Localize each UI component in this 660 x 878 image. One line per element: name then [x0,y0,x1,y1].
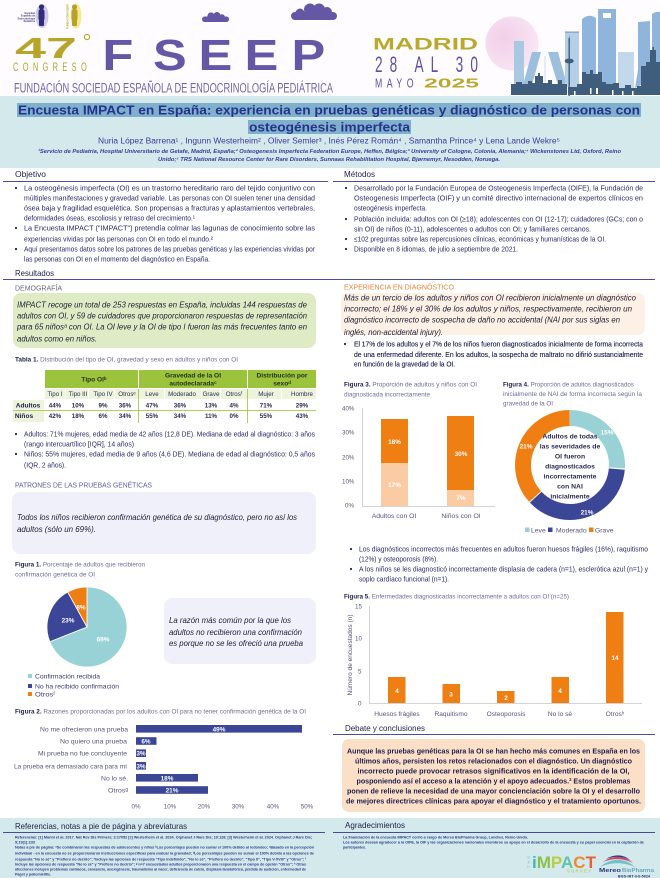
callout: reason: adultos no recibieron una confirmación [169,628,303,637]
references text: afecciones incluyen problemas cardíacos, cansancio, anoxigénesis, traumatismo al nacer, deficiencia de calcio, displasia tanatofórica, pérdida de audición, enfermedad de [15,866,307,872]
donut centre text: Adultos de todas [542,434,598,440]
demographics bullets: (rango intercuartílico [IQR], 14 años) [24,440,134,448]
bar chart: figure 2: Otrosᵍ [108,788,128,794]
stacked bar chart: figure 3: 30% [455,451,468,458]
bar chart: figure 5: 15 [355,604,362,610]
bar chart: figure 5: 4 [395,688,399,695]
logo: IMPACT survey: SURVEY [567,868,591,874]
bar chart: figure 2: La prueba era demasiado cara para mí [14,764,127,770]
foundation name: FUNDACIÓN SOCIEDAD ESPAÑOLA DE ENDOCRINOLOGÍA PEDIÁTRICA [14,80,333,96]
bar chart: figure 5: Otrosʰ [606,711,625,718]
callout: demografia summary: IMPACT recoge un total de 253 respuestas en España, incluidas 144 respuestas de [17,300,308,310]
bar chart: figure 5: Raquitismo [435,711,468,718]
table 1: 29% [296,402,309,410]
logo: FSEEP society: Española de [21,15,36,18]
logo: FSEEP society [18,4,48,28]
callout: conclusions: de mejores directrices clínicas para apoyar el diagnóstico y el tratamiento oportunos. [346,796,641,806]
experiencia bullet [344,340,643,368]
table 1: Tipo I [47,391,63,398]
table 1: Mujer [258,391,274,398]
callout: experiencia summary: inglés, non-accidental injury). [344,328,443,337]
table 1: Moderado [168,391,196,398]
callout: conclusions: últimos años, persisten los retos relacionados con el diagnóstico. Un diagnóstico [355,756,632,766]
donut centre text: diagnosticados [545,464,595,470]
misdiagnosis bullets: Los diagnósticos incorrectos más frecuentes en adultos fueron huesos frágiles (16%), raquitismo [359,544,648,554]
donut legend: Moderado [556,528,587,534]
donut centre text: con NAI [557,484,583,490]
bar chart: figure 2: 40% [267,804,280,810]
panel: objetivo [3,169,328,264]
objetivo bullets: ósea baja y fragilidad esquelética. Son propensas a fracturas y aplastamientos vertebrales, [24,204,315,212]
donut centre text: incorrectamente [544,474,597,480]
pie legend: No ha recibido confirmación [35,683,119,690]
stacked bar chart: figure 3: 18% [388,439,401,446]
heading: debate: Debate y conclusiones [345,723,425,733]
table 1: 55% [146,413,159,420]
heading: objetivo: Objetivo [15,169,46,179]
metodos bullets: Disponible en 8 idiomas, de julio a septiembre de 2021. [354,244,518,254]
heading: resultados: Resultados [15,268,54,278]
callout: conclusions: ponen de relieve la necesidad de una mayor concienciación sobre la OI y el desarrollo [347,786,640,796]
logo: FSEEP foundation: FUNDACIÓN FSEEP [66,4,70,29]
callout: experiencia summary: Más de un tercio de los adultos y niños con OI recibieron inicialmente un diagnóstico [344,294,637,302]
bar chart: figure 2: 18% [161,775,174,782]
location Madrid: MADRID [373,36,478,54]
stacked bar chart: figure 3: Adultos con OI [372,513,416,520]
references text: 9;19(1):233 [15,840,36,844]
table 1: sexoᵈ [273,380,291,388]
donut chart: figure 4: 15% [601,430,614,436]
dark silhouette [511,73,567,95]
bar chart: figure 2: No lo sé. [101,776,128,782]
callout: reason [164,598,316,664]
FSEEP wordmark: FSEEP [102,31,325,80]
bar chart: figure 2: 20% [198,804,211,810]
donut legend: Grave [595,528,614,534]
congress number 47: 47 [15,33,77,65]
demographics bullets: Adultos: 71% mujeres, edad media de 42 años (12,8 DE). Mediana de edad al diagnóstico: 3 años [24,430,315,438]
stacked bar chart: figure 3: 17% [388,482,401,489]
table 1: Distribución por [257,372,308,380]
bar chart: figure 2 [14,725,314,810]
figure 5 caption: Figura 5. Enfermedades diagnosticadas incorrectamente a adultos con OI (n=25) [344,594,569,600]
pink sun [486,16,538,70]
demographics bullets [15,430,315,470]
misdiagnosis bullets [350,544,648,584]
table 1: 4% [230,402,239,410]
callout: experiencia summary [341,293,645,337]
logo: FSEEP society: Sociedad [24,12,36,15]
stacked bar chart: figure 3: 20% [342,454,355,462]
table 1: 47% [146,402,159,410]
figure 4 caption: Figura 4. Proporción de adultos diagnosticados [503,382,635,388]
table 1: 44% [49,402,62,410]
objetivo bullets: las personas con OI en el momento del diagnóstico en España. [24,254,210,264]
heading: references: Referencias, notas a pie de página y abreviaturas [15,821,187,831]
bar chart: figure 2: 50% [301,804,314,810]
figure 2 caption: Figura 2. Razones proporcionadas por los adultos con OI para no tener confirmación genética de la OI [15,708,306,716]
callout: conclusions [342,739,645,812]
objetivo bullets [15,184,316,264]
bar chart: figure 5: Número de encuestados (n) [347,614,354,696]
icon: large cloud [291,4,337,20]
callout: reason: es porque no se les ofreció una prueba [169,639,304,648]
title band [0,96,660,168]
table 1: 10% [72,402,85,410]
table 1: Adultos [16,402,41,410]
title [18,102,640,134]
figure 4 caption: gravedad de la OI [503,400,553,408]
references text: Incluye las opciones de respuesta "No lo sé" y "Prefiero no decirlo"; ᵍ n=7 encuestados adultos proporcionaron una respuesta en el campo de opción "Otros"; ʰ Otras [15,862,306,866]
donut legend [525,528,614,534]
acknowledgements text: participantes. [343,844,366,850]
figure 1 caption: Figura 1. Porcentaje de adultos que recibieron [15,562,145,568]
year: 2025 [424,76,479,90]
logo: Mereo BioPharma [599,855,655,878]
table 1: Grave [203,391,220,398]
donut centre text: las severidades de [540,444,600,450]
stacked bar chart: figure 3: 10% [342,478,355,486]
figure 1 caption: confirmación genética de OI [15,572,95,578]
misdiagnosis bullets: (12%) y osteoporosis (8%). [359,554,438,564]
bar chart: figure 2: No me ofrecieron una prueba [40,726,128,734]
references text: Referencias: [1] Marini et al. 2017. Nat Rev Dis Primers; 3:17052 [2] Westerheim et al. 2024. Orphanet J Rare Dis; 19:128; [3] Westerheim et al. 2024. Orphanet J Rare Dis; [15,834,312,840]
table 1: 11% [205,413,218,420]
table 1: 55% [260,413,273,420]
references text: respuesta "No lo sé" y "Prefiero no decirlo"; ᵉIncluye las opciones de respuesta "Tipo indefinido", "No lo sé", "Prefiero no decirlo", "Tipo II", "Tipo V-XVIII" y "Otros"; ᶠ [15,856,306,862]
bar chart: figure 5: 0 [358,700,362,708]
dates: 28 AL 30 [375,52,478,77]
callout: patrones summary: adultos (sólo un 69%). [17,525,96,534]
references text [15,834,315,876]
Madrid skyline [511,9,660,96]
figure 3 caption: Figura 3. Proporción de adultos y niños con OI [344,382,477,388]
callout: demografia summary: adultos con OI, y 59 de cuidadores que proporcionaron respuestas de representación [17,312,308,320]
logo: Mereo BioPharma: Mereo [599,868,622,874]
metodos bullets [345,184,643,254]
logo: Mereo BioPharma: BioPharma [622,868,655,874]
references text: individual - en la encuesta no se proporcionaron instrucciones específicas para evaluar la gravedad; ᵈLos porcentajes pueden no sumar el 100% debido a las opciones de [15,850,315,856]
metodos bullets: Población incluida: adultos con OI (≥18); adolescentes con OI (12-17); cuidadores (GCs; con o [354,214,643,224]
heading: metodos: Métodos [344,169,375,179]
congress header banner [0,0,660,96]
experiencia bullet: en función de la gravedad de la OI. [354,360,455,368]
metodos bullets: sin OI) de niños (0-11), adolescentes o adultos con OI; y familiares cercanos. [354,224,591,234]
donut chart: figure 4 [520,418,617,516]
pie chart: figure 1: 8% [76,604,86,612]
bar chart: figure 5 [347,604,642,718]
metodos bullets: Osteogenesis Imperfecta (OIF) y un comité directivo internacional de expertos clínicos en [354,194,643,202]
bar chart: figure 2: 10% [164,804,177,810]
objetivo bullets: Aquí presentamos datos sobre los patrones de las pruebas genéticas y las experiencias vividas por [24,244,316,254]
table 1: Otrosᵉ [118,391,136,398]
bar chart: figure 2: 21% [166,788,179,794]
bar chart: figure 5: 4 [558,688,562,695]
bar chart: figure 5: Huesos frágiles [374,711,420,718]
table 1: 6% [99,413,108,420]
table caption: Tabla 1. Distribución del tipo de OI, gravedad y sexo en adultos y niños con OI [15,356,238,364]
pie legend: Confirmación recibida [35,673,100,680]
table 1: 42% [49,413,62,420]
bar chart: figure 2: Mi prueba no fue concluyente [38,750,127,758]
bar chart: figure 5: 10 [355,636,362,642]
bar chart: figure 2: 3% [136,751,146,758]
stacked bar chart: figure 3 [342,406,495,520]
bar chart: figure 5: 5 [358,668,362,676]
table 1: 43% [296,413,309,420]
table 1: 36% [174,402,187,410]
subheading: experiencia: EXPERIENCIA EN DIAGNÓSTICO [344,282,454,292]
callout: experiencia summary: diagnóstico incorrecto de sospecha de daño no accidental (NAI por sus siglas en [344,316,621,324]
acknowledgements text [343,834,645,850]
table 1: 34% [174,413,187,420]
heading: acknowledgements: Agradecimientos [345,820,405,830]
table 1: Otrosᶠ [226,391,243,398]
table 1: 9% [99,402,108,410]
callout: conclusions: posponiendo así el acceso a la atención y el apoyo adecuados.³ Estos problemas [356,776,630,786]
objetivo bullets: múltiples manifestaciones y gravedad variable. Las personas con OI suelen tener una densidad [24,194,315,202]
callout: patrones summary [12,492,316,554]
bar chart: figure 5: Osteoporosis [487,711,526,718]
table 1: 71% [260,402,273,410]
donut chart: figure 4: 21% [581,510,594,516]
figure 1 caption [15,562,145,578]
table 1: 36% [119,402,132,410]
bar chart: figure 2: 0% [132,804,141,810]
table 1: Leve [145,391,159,398]
donut legend: Leve [531,528,546,534]
references text: Paget y poliomielitis. [15,872,51,876]
callout: reason: La razón más común por la que los [169,616,291,625]
figure 3 caption: diagnosticada incorrectamente [344,392,430,398]
donut centre text: OI fueron [555,454,585,460]
objetivo bullets: experiencias vividas por las personas con OI en todo el mundo.² [24,234,214,244]
bar chart: figure 2: 6% [141,738,151,746]
panel: metodos [333,169,655,254]
acknowledgements text: La financiación de la encuesta IMPACT corrió a cargo de Mereo BioPharma Group, Londres, Reino Unido. [343,834,528,840]
title: osteogénesis imperfecta [249,120,411,134]
title: Encuesta IMPACT en España: experiencia en pruebas genéticas y diagnóstico de personas con [18,102,640,118]
bar chart: figure 2: 30% [232,804,245,810]
table 1: 13% [205,402,218,410]
stacked bar chart: figure 3: Niños con OI [441,513,481,520]
table 1: Hombre [291,391,314,398]
donut centre text: inicialmente [550,494,590,500]
table 1: 34% [119,413,132,420]
misdiagnosis bullets: soplo cardíaco funcional (n=1). [359,574,449,584]
callout: demografia summary: para 65 niñosᵃ con OI. La OI leve y la OI de tipo I fueron las más frecuentes tanto en [16,322,308,332]
logo: FSEEP foundation [66,4,82,29]
objetivo bullets: La Encuesta IMPACT ("IMPACT") pretendía colmar las lagunas de conocimiento sobre las [24,224,315,232]
misdiagnosis bullets: A los niños se les diagnosticó incorrectamente displasia de cadera (n=1), esclerótica azul (n=1) y [359,564,648,574]
bar chart: figure 5: No lo sé [548,711,572,718]
logo: FSEEP society: Pediátrica [24,20,36,23]
table 1: Tipo IV [93,391,114,398]
authors: Nuria López Barrena¹ , Ingunn Westerheim² , Oliver Semler³ , Inés Pérez Román⁴ , Samantha Prince⁴ y Lena Lande Wekre⁵ [98,136,560,146]
bar chart: figure 5: 14 [611,655,619,662]
table 1: 0% [230,413,239,420]
objetivo bullets: La osteogénesis imperfecta (OI) es un trastorno hereditario raro del tejido conjuntivo con [24,184,315,192]
acknowledgements text: Los autores desean agradecer a la OIFE, la OIF y las organizaciones nacionales miembros su apoyo en el desarrollo de la encuesta y su papel esencial en la captación de [343,840,645,844]
bar chart: figure 2: No quiero una prueba [60,738,127,746]
experiencia bullet: de una enfermedad diferente. En los adultos, la sospecha de maltrato no difirió sustancialmente [354,350,643,359]
metodos bullets: ≤102 preguntas sobre las repercusiones clínicas, económicas y humanísticas de la OI. [354,234,606,244]
pie legend: Otrosᶠ [35,691,56,698]
table 1: autodeclaradaᶜ [169,380,217,388]
experiencia bullet: El 17% de los adultos y el 7% de los niños fueron diagnosticados inicialmente de forma incorrecta [354,340,643,348]
table 1: Tipo III [69,391,88,398]
panel: references [3,821,325,876]
callout: conclusions: incorrecto puede provocar retrasos significativos en la identificación de la OI, [358,766,630,776]
demographics bullets: Niños: 55% mujeres, edad media de 9 años (4,6 DE). Mediana de edad al diagnóstico: 0,5 años [24,450,315,458]
pie legend [28,673,119,698]
icon: small cloud [202,12,229,22]
figure 4 caption: inicialmente de NAI de forma incorrecta según la [503,391,642,398]
bar chart: figure 5: 3 [449,692,453,698]
callout: experiencia summary: incorrecto; el 18% y el 30% de los adultos y niños, respectivamente, recibieron un [344,304,633,314]
callout: patrones summary: Todos los niños recibieron confirmación genética de su diagnóstico, pero no así los [17,513,297,522]
affiliations: Unido;⁵ TRS National Resource Center for Rare Disorders, Sunnaas Rehabilitation Hospital, Bjørnemyr, Nesodden, Noruega. [158,157,501,163]
degree sign [84,34,90,40]
table 1: 18% [72,413,85,420]
congreso label: CONGRESO [13,61,87,75]
bar chart: figure 2: 49% [213,726,226,733]
objetivo bullets: deformidades óseas, escoliosis y retraso del crecimiento.¹ [24,214,196,222]
donut chart: figure 4: 21% [520,444,533,450]
donut centre text [540,434,600,500]
pie chart: figure 1: 23% [62,618,75,624]
logo: FSEEP society: Endocrinología [18,17,36,20]
table 1: Niños [15,413,33,420]
metodos bullets: Desarrollado por la Fundación Europea de Osteogenesis Imperfecta (OIFE), la Fundación de [354,184,643,192]
callout: demografia summary [13,293,316,348]
stacked bar chart: figure 3: 30% [342,430,355,436]
pie chart: figure 1 [47,587,127,667]
table 1: Tipo OIᵇ [81,376,107,384]
pie chart: figure 1: 69% [97,636,110,644]
logo: IMPACT survey: THE [526,856,531,868]
callout: conclusions: Aunque las pruebas genéticas para la OI se han hecho más comunes en España en los [347,746,640,756]
bar chart: figure 2: 3% [136,763,146,770]
affiliations: ¹Servicio de Pediatría, Hospital Universitario de Getafe, Madrid, España;² Osteogenesis Imperfecta Federation Europe, Heffen, Bélgica;³ University of Cologne, Colonia, Alemania;⁴ Wickenstones Ltd, Oxford, Reino [38,149,622,155]
stacked bar chart: figure 3: 40% [342,406,355,412]
footer band [0,818,660,878]
figure 3 caption [344,382,477,398]
logo: IMPACT survey: iMPACT [532,854,596,872]
month: MAYO [375,77,413,91]
demographics bullets: (IQR, 2 años). [24,460,66,470]
callout: demografia summary: adultos como en niños. [17,334,97,344]
table 1: Gravedad de la OI [165,372,221,380]
bar chart: figure 5: 2 [504,695,508,702]
metodos bullets: osteogénesis imperfecta. [354,204,427,212]
subheading: demografia: DEMOGRAFÍA [15,284,62,292]
affiliations [38,149,622,163]
table 1 [13,370,316,423]
references text: Notas a pie de página: ᵃSe combinaron las respuestas de adolescentes y niños ᵇLos porcentajes pueden no sumar el 100% debido al redondeo; ᶜBasado en la percepción [15,844,315,850]
stacked bar chart: figure 3: 7% [456,495,466,502]
subheading: patrones: PATRONES DE LAS PRUEBAS GENÉTICAS [15,480,152,490]
stacked bar chart: figure 3: 0% [345,502,354,510]
panel: acknowledgements [333,820,655,878]
figure 4 caption [503,382,642,408]
